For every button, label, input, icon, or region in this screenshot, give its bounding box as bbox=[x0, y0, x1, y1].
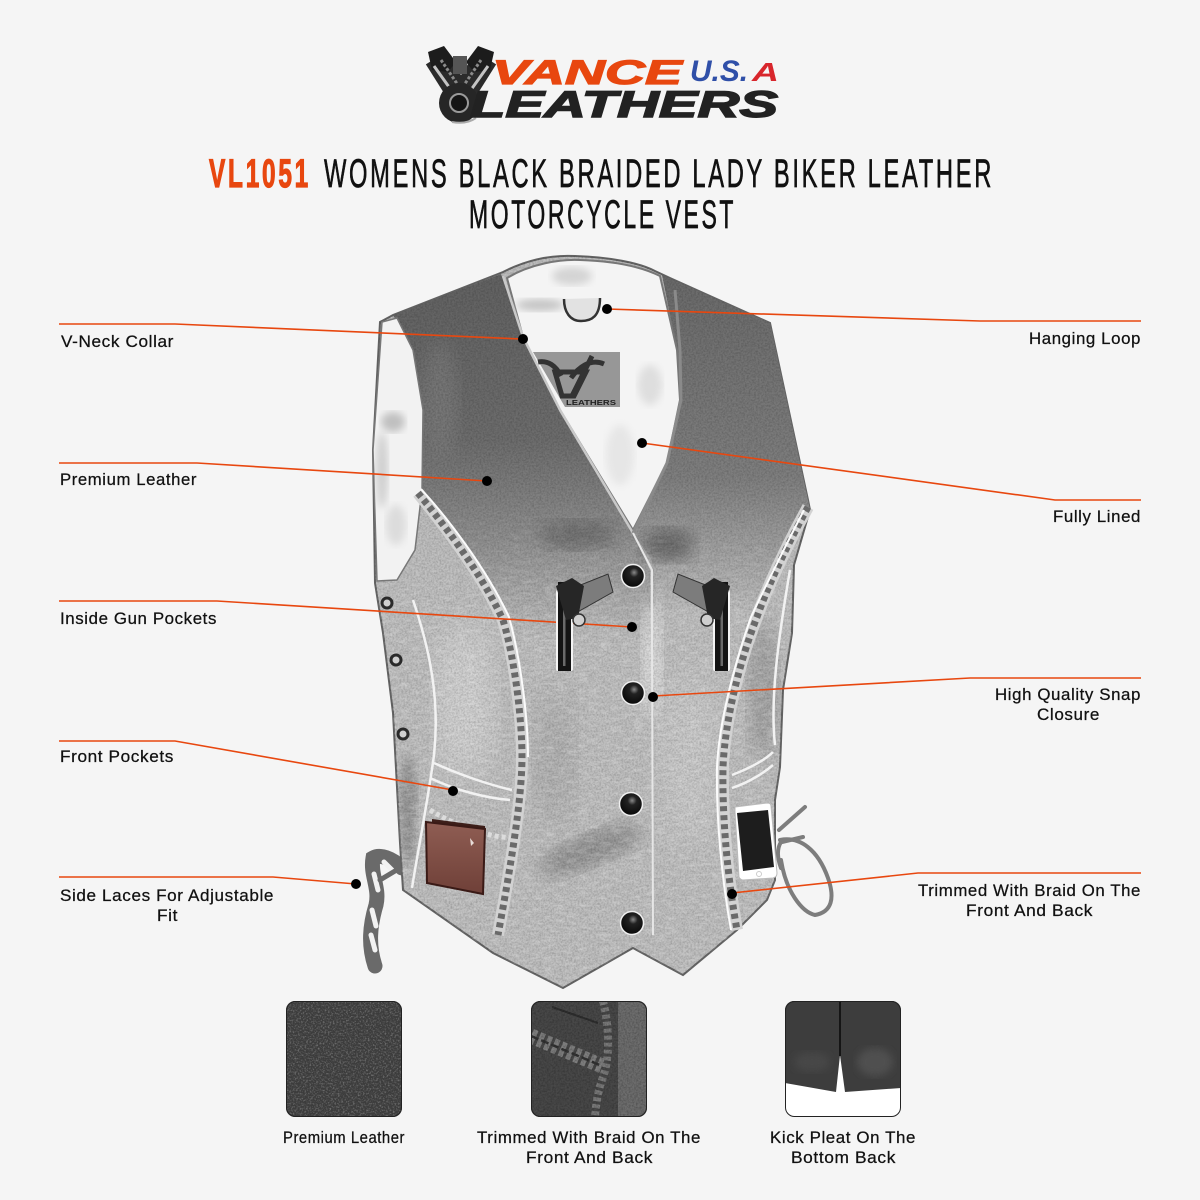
icon: wallet bbox=[426, 819, 485, 894]
callout labels left bbox=[60, 332, 274, 925]
label: v-neck collar: V-Neck Collar bbox=[61, 332, 174, 351]
title line 1 code: VL1051 bbox=[209, 152, 311, 196]
caption: trimmed with braid: Trimmed With Braid On The bbox=[477, 1128, 701, 1147]
label: fully lined: Fully Lined bbox=[1053, 507, 1141, 526]
hanging loop bbox=[564, 298, 600, 321]
icon: smartphone bbox=[735, 803, 777, 880]
icon: v-twin engine bbox=[428, 46, 494, 123]
logo word LEATHERS: LEATHERS bbox=[470, 84, 778, 125]
snap buttons bbox=[620, 564, 644, 934]
caption: premium leather: Premium Leather bbox=[283, 1129, 405, 1147]
label: inside gun pockets: Inside Gun Pockets bbox=[60, 609, 217, 628]
vest shading bbox=[360, 250, 820, 990]
label: premium leather: Premium Leather bbox=[60, 470, 197, 489]
swatch: premium leather bbox=[286, 1001, 402, 1117]
inner lining bbox=[507, 260, 680, 530]
swatch: kick pleat bbox=[785, 1001, 901, 1117]
icon: left gun bbox=[556, 574, 613, 671]
side seams and pocket welts bbox=[412, 570, 790, 888]
collar label tag: LEATHERS bbox=[566, 398, 616, 407]
caption: bottom back: Bottom Back bbox=[791, 1148, 896, 1167]
callout dots bbox=[351, 304, 737, 899]
left braid trim bbox=[418, 489, 528, 935]
lapel seams bbox=[503, 276, 681, 533]
label: closure: Closure bbox=[1037, 705, 1100, 724]
icon: right gun bbox=[673, 574, 730, 671]
vest body bbox=[373, 256, 810, 988]
label: trimmed with braid: Trimmed With Braid On The bbox=[918, 881, 1141, 900]
label: front and back: Front And Back bbox=[966, 901, 1093, 920]
logo word A: A bbox=[751, 57, 779, 87]
callout leader lines bbox=[59, 309, 1141, 893]
icon: left lace bbox=[371, 856, 402, 966]
right braid trim bbox=[717, 507, 808, 930]
label: hanging loop: Hanging Loop bbox=[1029, 329, 1141, 348]
left chest panel bbox=[393, 274, 650, 640]
vest illustration bbox=[360, 250, 832, 990]
right chest panel bbox=[633, 275, 810, 610]
logo word U.S.: U.S. bbox=[690, 55, 748, 88]
title bbox=[209, 152, 994, 237]
label: front pockets: Front Pockets bbox=[60, 747, 174, 766]
icon: right lace bbox=[778, 807, 832, 915]
callout labels right bbox=[918, 329, 1141, 920]
caption: kick pleat: Kick Pleat On The bbox=[770, 1128, 916, 1147]
label: side laces: Side Laces For Adjustable bbox=[60, 886, 274, 905]
side lace eyelets bbox=[382, 598, 408, 739]
collar label tag bbox=[533, 352, 620, 407]
swatch captions bbox=[283, 1128, 916, 1167]
armhole lining bbox=[373, 318, 423, 581]
swatch: braid detail bbox=[531, 1001, 647, 1117]
label: side laces second line: Fit bbox=[157, 906, 178, 925]
logo: Vance Leathers USA bbox=[428, 46, 779, 125]
logo word VANCE: VANCE bbox=[492, 54, 684, 92]
placket seam bbox=[633, 533, 653, 935]
caption: front and back: Front And Back bbox=[526, 1148, 653, 1167]
label: high quality snap: High Quality Snap bbox=[995, 685, 1141, 704]
title line 2: MOTORCYCLE VEST bbox=[469, 193, 736, 237]
